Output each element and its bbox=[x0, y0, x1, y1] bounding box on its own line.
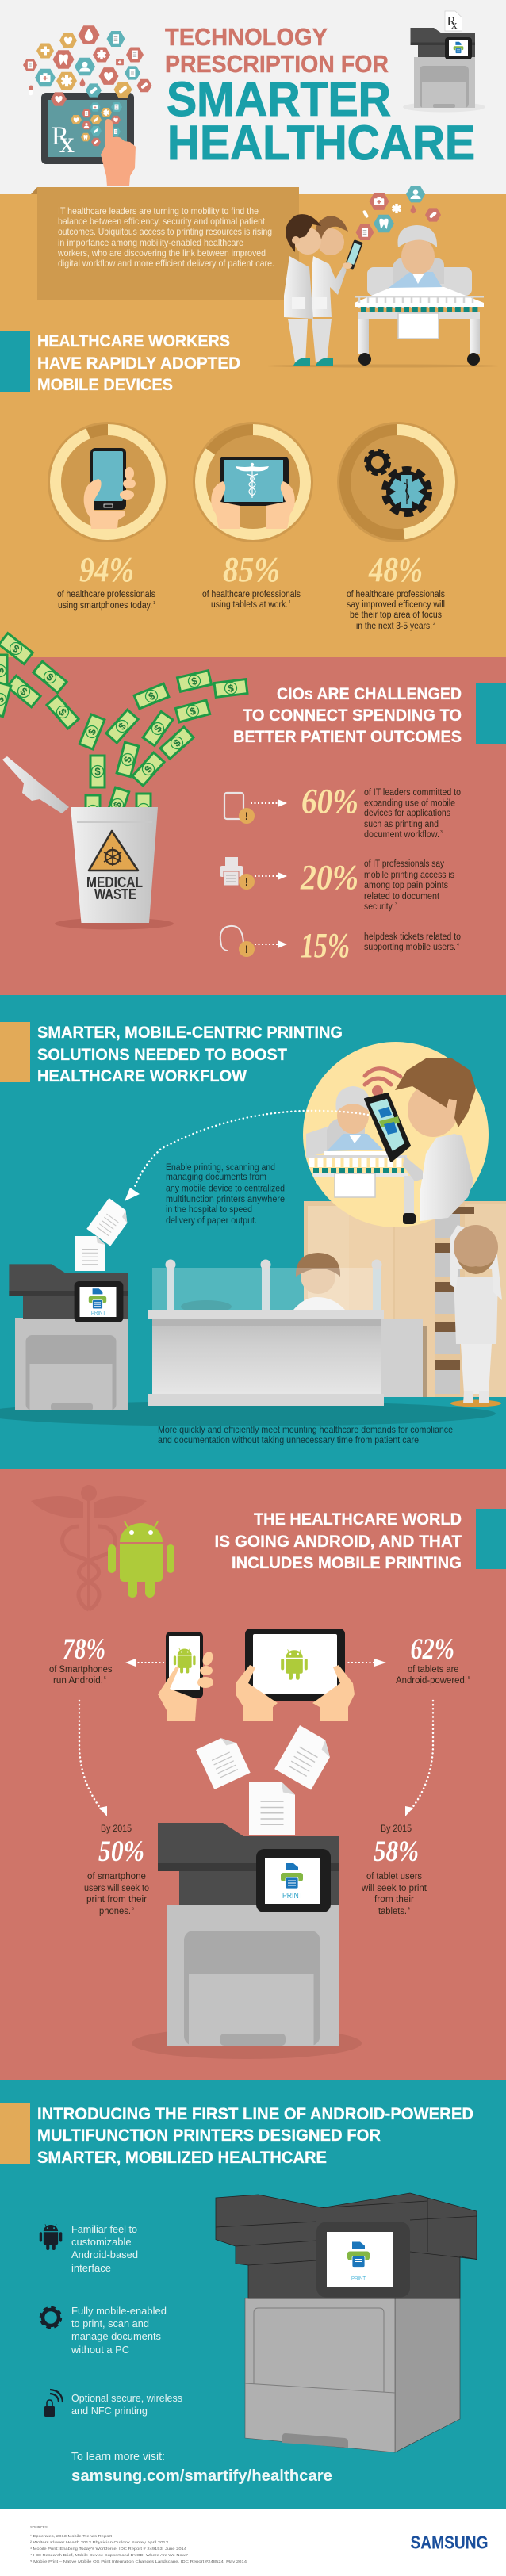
text: by 2015 tablet: tablets. bbox=[378, 1907, 407, 1916]
illustration: money flying from bin: $ bbox=[189, 705, 197, 718]
heading: introducing bbox=[0, 2103, 473, 2167]
heading: CIOs challenged: BETTER PATIENT OUTCOMES bbox=[233, 728, 462, 746]
stat row: 60 percent bbox=[224, 782, 461, 840]
illustration: money flying from bin: $ bbox=[151, 722, 165, 734]
stat: 62 percent bbox=[396, 1633, 470, 1686]
title: PRESCRIPTION FOR bbox=[165, 51, 389, 78]
intro ribbon: workers, who are discovering the link between improved bbox=[57, 247, 266, 258]
text: by 2015 smartphone bbox=[84, 1824, 149, 1916]
stat row: 15 percent: supporting mobile users. bbox=[364, 943, 456, 952]
illustration: large printer bbox=[132, 1823, 362, 2059]
heading: smarter mobile-centric printing: HEALTHCARE WORKFLOW bbox=[37, 1067, 247, 1085]
stat: 62 percent: of tablets are bbox=[408, 1665, 458, 1675]
stat: 85 percent bbox=[202, 550, 301, 610]
icon: tablet with Rx bbox=[41, 79, 152, 164]
illustration: money flying from bin: $ bbox=[111, 800, 124, 810]
sources: ⁵ Mobile Print – Native Mobile OS Print Integration Changes Landscape. IDC Report #248524. May 2014 bbox=[30, 2559, 247, 2564]
icon: headset alert bbox=[220, 926, 287, 957]
illustration: android-powered printer bbox=[216, 2193, 477, 2452]
stat row: 20 percent: mobile printing access is bbox=[364, 871, 454, 880]
intro ribbon: in importance among mobility-enabled healthcare bbox=[58, 237, 243, 248]
stat row: 20 percent bbox=[220, 857, 454, 912]
feature: android interface: customizable bbox=[71, 2236, 132, 2248]
stat row: 60 percent: of IT leaders committed to bbox=[364, 788, 461, 798]
icon: caduceus watermark bbox=[31, 1485, 147, 1610]
illustration: medical waste bin: WASTE bbox=[94, 886, 136, 902]
intro ribbon: digital workflow and more efficient delivery of patient care. bbox=[58, 258, 274, 269]
sources: ¹ Epocrates, 2013 Mobile Trends Report bbox=[30, 2534, 113, 2539]
sources: ² Wolters Kluwer Health 2013 Physician Outlook Survey April 2013 bbox=[30, 2540, 168, 2545]
panel: android-powered printers bbox=[0, 2080, 506, 2509]
stat row: 60 percent: devices for applications bbox=[364, 809, 450, 818]
heading: CIOs challenged: CIOs ARE CHALLENGED bbox=[277, 685, 462, 703]
stat: 62 percent: 62% bbox=[411, 1633, 454, 1666]
icon: phone alert bbox=[224, 793, 287, 824]
stat row: 15 percent: helpdesk tickets related to bbox=[364, 932, 461, 942]
heading: smarter mobile-centric printing bbox=[0, 1022, 343, 1085]
illustration: money flying from bin: $ bbox=[116, 720, 129, 733]
stat row: 60 percent: 60% bbox=[301, 782, 358, 821]
sources: ³ Mobile Print: Enabling Today's Workforce. IDC Report # 249153. June 2014 bbox=[30, 2547, 186, 2551]
feature: secure wireless: and NFC printing bbox=[71, 2405, 148, 2417]
heading: android bbox=[214, 1509, 506, 1572]
text: compliance note: and documentation without taking unnecessary time from patient care. bbox=[158, 1436, 421, 1445]
stat: 85 percent: using tablets at work. bbox=[211, 600, 288, 610]
panel: mobile-centric printing bbox=[0, 995, 506, 1469]
illustration: doctor with phone in circle bbox=[125, 1042, 489, 1227]
illustration: money flying from bin: $ bbox=[142, 763, 155, 775]
illustration: medical waste bin bbox=[2, 756, 174, 929]
intro ribbon: outcomes. Ubiquitous access to printing resources is rising bbox=[58, 226, 272, 237]
text: enable printing: Enable printing, scanning and bbox=[166, 1163, 275, 1173]
chart: 48 percent ring with gears bbox=[337, 422, 458, 542]
illustration: multifunction printer: PRINT bbox=[91, 1311, 105, 1316]
heading: healthcare workers bbox=[0, 331, 240, 394]
stat: 48 percent: be their top area of focus bbox=[350, 611, 442, 620]
stat: 78 percent: of Smartphones bbox=[49, 1665, 113, 1675]
illustration: doctors with patient bbox=[264, 186, 502, 368]
stat row: 20 percent: security. bbox=[364, 902, 394, 912]
stat: 94 percent bbox=[57, 550, 155, 611]
heading: healthcare workers: HEALTHCARE WORKERS bbox=[37, 332, 230, 350]
illustration: money flying from bin bbox=[0, 631, 249, 828]
panel: healthcare workers bbox=[0, 186, 506, 657]
stat: 85 percent: 1 bbox=[289, 600, 291, 605]
text: enable printing bbox=[166, 1163, 285, 1226]
stat: 62 percent: Android-powered. bbox=[396, 1676, 467, 1686]
text: by 2015 tablet bbox=[361, 1824, 427, 1916]
icon: floating medical hexagons bbox=[23, 25, 144, 96]
text: enable printing: any mobile device to centralized bbox=[166, 1185, 285, 1194]
title: HEALTHCARE bbox=[167, 116, 475, 170]
stat: 94 percent: of healthcare professionals bbox=[57, 590, 155, 599]
stat: 48 percent: 2 bbox=[433, 622, 435, 626]
Rx symbol: x bbox=[59, 126, 75, 159]
stat: 48 percent bbox=[347, 550, 445, 631]
call to action bbox=[71, 2450, 332, 2485]
feature: mobile enabled: to print, scan and bbox=[71, 2318, 149, 2329]
stat row: 20 percent: related to document bbox=[364, 892, 440, 901]
heading: smarter mobile-centric printing: SMARTER, MOBILE-CENTRIC PRINTING bbox=[37, 1024, 343, 1042]
text: by 2015 smartphone: By 2015 bbox=[101, 1824, 132, 1834]
icon: printer with prescription: x bbox=[451, 19, 458, 32]
heading: introducing: MULTIFUNCTION PRINTERS DESIGNED FOR bbox=[37, 2126, 381, 2145]
stat row: 60 percent: 3 bbox=[440, 830, 443, 835]
text: by 2015 smartphone: phones. bbox=[99, 1907, 131, 1916]
text: by 2015 tablet: will seek to print bbox=[361, 1884, 427, 1893]
Rx symbol: R bbox=[52, 122, 69, 151]
illustration: multifunction printer bbox=[9, 1198, 132, 1410]
illustration: money flying from bin: $ bbox=[10, 642, 22, 656]
icon: printer alert bbox=[220, 857, 287, 890]
text: by 2015 tablet: 4 bbox=[408, 1907, 410, 1912]
heading: healthcare workers: HAVE RAPIDLY ADOPTED bbox=[37, 354, 240, 373]
stat: 78 percent: run Android. bbox=[53, 1676, 103, 1686]
feature: mobile enabled bbox=[41, 2305, 167, 2356]
stat: 48 percent: 48% bbox=[368, 550, 423, 589]
feature: android interface: Familiar feel to bbox=[71, 2223, 137, 2235]
stat row: 15 percent: 4 bbox=[457, 943, 459, 947]
text: enable printing: in the hospital to speed bbox=[166, 1205, 252, 1215]
text: by 2015 smartphone: 5 bbox=[132, 1907, 134, 1912]
stat: 85 percent: of healthcare professionals bbox=[202, 590, 301, 599]
stat: 94 percent: 1 bbox=[153, 601, 155, 606]
arrows: dotted from devices bbox=[79, 1659, 433, 1816]
icon: headset alert: ! bbox=[245, 943, 248, 955]
stat: 94 percent: using smartphones today. bbox=[58, 601, 152, 611]
feature: android interface bbox=[40, 2223, 138, 2274]
icon: pointing hand bbox=[101, 119, 136, 186]
icon: printer alert: ! bbox=[245, 875, 248, 888]
stat row: 60 percent: document workflow. bbox=[364, 830, 439, 840]
icon: papers bbox=[196, 1725, 336, 1835]
illustration: money flying from bin: $ bbox=[171, 736, 183, 749]
text: compliance note bbox=[158, 1426, 453, 1445]
call to action: To learn more visit: bbox=[71, 2450, 165, 2463]
icon: phone alert: ! bbox=[245, 810, 248, 822]
text: enable printing: managing documents from bbox=[166, 1173, 266, 1182]
Rx symbol bbox=[52, 122, 75, 159]
stat: 48 percent: say improved efficency will bbox=[347, 600, 445, 610]
text: by 2015 smartphone: of smartphone bbox=[87, 1872, 146, 1881]
heading: android: INCLUDES MOBILE PRINTING bbox=[232, 1554, 462, 1572]
chart: 85 percent ring with tablet bbox=[193, 422, 313, 542]
illustration: money flying from bin: $ bbox=[86, 726, 99, 737]
sources bbox=[30, 2525, 247, 2564]
stat: 78 percent bbox=[49, 1633, 113, 1686]
icon: phone in hand bbox=[158, 1632, 215, 1721]
illustration: money flying from bin: $ bbox=[56, 706, 70, 718]
stat row: 20 percent: 20% bbox=[300, 858, 358, 897]
stat: 62 percent: 5 bbox=[468, 1676, 470, 1681]
intro ribbon: IT healthcare leaders are turning to mobility to find the bbox=[58, 205, 259, 216]
icon: tablet in hands bbox=[236, 1629, 355, 1721]
panel: footer bbox=[0, 2509, 506, 2576]
chart: 94 percent ring with smartphone bbox=[48, 422, 168, 542]
title: SMARTER bbox=[167, 72, 391, 126]
text: enable printing: delivery of paper output. bbox=[166, 1216, 257, 1226]
heading: healthcare workers: MOBILE DEVICES bbox=[37, 376, 173, 394]
stat: 85 percent: 85% bbox=[223, 550, 280, 589]
illustration: large printer: PRINT bbox=[282, 1892, 303, 1900]
illustration: money flying from bin: $ bbox=[227, 682, 235, 695]
text: compliance note: More quickly and efficiently meet mounting healthcare demands for compliance bbox=[158, 1426, 453, 1435]
stat row: 60 percent: expanding use of mobile bbox=[364, 799, 455, 809]
stat: 78 percent: 78% bbox=[63, 1633, 105, 1666]
text: by 2015 tablet: By 2015 bbox=[381, 1824, 412, 1834]
text: by 2015 smartphone: 50% bbox=[98, 1835, 144, 1868]
intro ribbon bbox=[31, 187, 299, 300]
heading: introducing: INTRODUCING THE FIRST LINE OF ANDROID-POWERED bbox=[37, 2105, 473, 2123]
illustration: money flying from bin: $ bbox=[94, 766, 101, 777]
text: by 2015 tablet: of tablet users bbox=[366, 1872, 422, 1881]
illustration: money flying from bin: $ bbox=[147, 689, 157, 702]
panel: title header bbox=[0, 0, 506, 194]
stat row: 20 percent: among top pain points bbox=[364, 881, 448, 890]
illustration: android-powered printer: PRINT bbox=[351, 2276, 366, 2282]
heading: introducing: SMARTER, MOBILIZED HEALTHCARE bbox=[37, 2149, 327, 2167]
panel: CIOs challenged bbox=[0, 631, 506, 995]
illustration: hospital reception bbox=[0, 1201, 506, 1426]
panel: android bbox=[0, 1469, 506, 2080]
feature: secure wireless bbox=[44, 2390, 182, 2417]
intro ribbon: balance between efficiency, security and optimal patient bbox=[58, 216, 266, 227]
icon: android mascot bbox=[108, 1521, 174, 1598]
call to action: samsung.com/smartify/healthcare bbox=[71, 2467, 332, 2485]
heading: android: IS GOING ANDROID, AND THAT bbox=[214, 1533, 462, 1551]
stat: 78 percent: 5 bbox=[104, 1676, 106, 1681]
stat row: 60 percent: such as printing and bbox=[364, 820, 439, 829]
feature: mobile enabled: manage documents bbox=[71, 2330, 161, 2342]
stat row: 20 percent: of IT professionals say bbox=[364, 859, 444, 869]
stat: 48 percent: in the next 3-5 years. bbox=[356, 622, 432, 631]
heading: CIOs challenged bbox=[233, 683, 506, 746]
text: enable printing: multifunction printers anywhere bbox=[166, 1195, 285, 1204]
stat row: 20 percent: 3 bbox=[395, 902, 397, 907]
text: by 2015 tablet: 58% bbox=[374, 1835, 419, 1868]
text: by 2015 tablet: from their bbox=[374, 1895, 414, 1904]
stat row: 15 percent: 15% bbox=[301, 926, 350, 965]
feature: secure wireless: Optional secure, wireless bbox=[71, 2392, 182, 2404]
stat row: 15 percent bbox=[220, 926, 461, 965]
dotted arrow to printer bbox=[125, 1111, 368, 1201]
title bbox=[165, 24, 475, 170]
icon: printer with prescription: R bbox=[447, 13, 457, 29]
heading: android: THE HEALTHCARE WORLD bbox=[254, 1510, 462, 1529]
stat: 48 percent: of healthcare professionals bbox=[347, 590, 445, 599]
feature: android interface: interface bbox=[71, 2262, 111, 2274]
illustration: money flying from bin: $ bbox=[17, 685, 30, 699]
feature: mobile enabled: Fully mobile-enabled bbox=[71, 2305, 167, 2317]
icon: printer with prescription bbox=[403, 11, 485, 113]
stat: 94 percent: 94% bbox=[79, 550, 134, 589]
illustration: money flying from bin: $ bbox=[190, 675, 199, 687]
illustration: money flying from bin: $ bbox=[44, 671, 56, 684]
heading: CIOs challenged: TO CONNECT SPENDING TO bbox=[243, 706, 462, 725]
feature: mobile enabled: without a PC bbox=[71, 2344, 129, 2356]
text: by 2015 smartphone: print from their bbox=[86, 1895, 147, 1904]
sources: SOURCES: bbox=[30, 2525, 48, 2530]
sources: ⁴ HDI Research Brief, Mobile Device Support and BYOD: Where Are We Now? bbox=[30, 2553, 188, 2558]
logo: Samsung: SAMSUNG bbox=[411, 2532, 489, 2553]
illustration: medical waste bin: MEDICAL bbox=[86, 875, 143, 890]
illustration: money flying from bin: $ bbox=[121, 755, 134, 764]
title: TECHNOLOGY bbox=[165, 24, 328, 51]
feature: android interface: Android-based bbox=[71, 2249, 138, 2260]
text: by 2015 smartphone: users will seek to bbox=[84, 1884, 149, 1893]
heading: smarter mobile-centric printing: SOLUTIONS NEEDED TO BOOST bbox=[37, 1046, 287, 1064]
